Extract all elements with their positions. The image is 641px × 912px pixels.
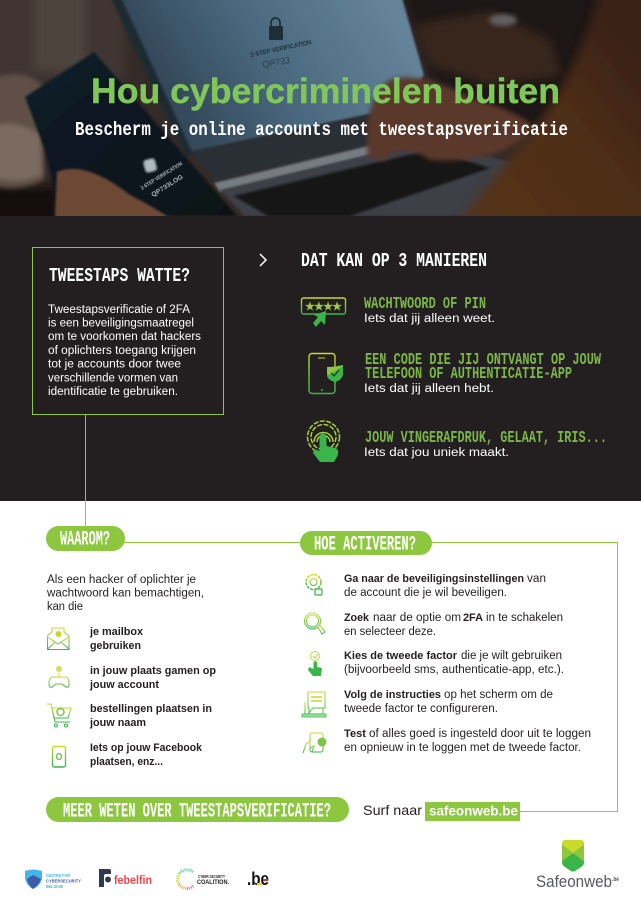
reason 1 (89, 626, 144, 652)
icon: fingerprint with hand (308, 421, 340, 462)
logo: cyber security coalition: COALITION. (197, 879, 229, 886)
step 5: of alles goed is ingesteld door uit te loggen (369, 728, 591, 740)
text block: definition: tot je accounts door twee (48, 358, 181, 370)
reason 3: jouw naam (89, 717, 146, 729)
icon: phone in hand with check (303, 733, 326, 753)
heading: tweestaps watte: TWEESTAPS WATTE? (49, 265, 190, 287)
logo: centre for cybersecurity belgium: CYBERSECURITY (46, 878, 82, 884)
method 1 text (364, 295, 495, 325)
reason 2: in jouw plaats gamen op (90, 665, 216, 677)
icon: shopping cart with bug (46, 704, 71, 727)
title: Hou cybercriminelen buiten (91, 72, 560, 111)
step 4: op het scherm om de (444, 689, 553, 701)
call to action pill (46, 797, 349, 824)
reason 4: Iets op jouw Facebook (90, 742, 203, 754)
icon: magnifying glass (304, 613, 325, 634)
icon: chevron (260, 254, 266, 266)
reason 3 (89, 703, 212, 729)
text block: waarom intro: Als een hacker of oplichter je (47, 574, 196, 586)
heading pill: hoe activeren: HOE ACTIVEREN? (314, 534, 416, 556)
method 2 text: Iets dat jij alleen hebt. (364, 383, 494, 395)
logo: .be: .be (247, 869, 269, 889)
text block: definition: is een beveiligingsmaatregel (48, 318, 194, 330)
logo: safeonweb (536, 840, 620, 891)
step 2: 2FA (463, 612, 483, 624)
reason 4 (90, 742, 203, 768)
method 1 text: WACHTWOORD OF PIN (364, 295, 486, 314)
step 2: in te schakelen (486, 612, 563, 624)
step 3 (344, 650, 564, 676)
icon: hand with check (308, 652, 322, 676)
surf naar text: Surf naar (363, 802, 422, 818)
connector line between panels and footer (124, 542, 618, 812)
text block: definition: verschillende vormen van (48, 372, 178, 384)
lock icons in photo (269, 18, 283, 40)
hero photo: laptop and phone with 2-step verification (0, 0, 641, 226)
heading: dat kan op 3 manieren: DAT KAN OP 3 MANIEREN (301, 250, 487, 272)
step 3: (bijvoorbeeld sms, authenticatie-app, etc.). (344, 664, 564, 676)
logo: cyber security coalition: CYBER SECURITY (198, 874, 226, 880)
step 4: Volg de instructies (344, 689, 441, 701)
website badge: safeonweb.be (429, 802, 518, 818)
text block: definition: om te voorkomen dat hackers (48, 331, 201, 343)
step 1: van (527, 573, 546, 585)
step 2: en selecteer deze. (344, 626, 436, 638)
logo: safeonweb: Safeonweb (536, 873, 612, 891)
logo: febelfin: febelfin (114, 875, 152, 887)
reason 1: je mailbox (89, 626, 144, 638)
hero photo: laptop and phone with 2-step verification: 2-STEP VERIFICATION (140, 161, 184, 192)
step 4 (344, 689, 553, 715)
heading pill: waarom: WAAROM? (60, 528, 110, 552)
step 4: tweede factor te configureren. (344, 703, 498, 715)
call to action pill: MEER WETEN OVER TWEESTAPSVERIFICATIE? (63, 800, 331, 824)
panel: tweestaps watte (32, 248, 224, 414)
reason 3: bestellingen plaatsen in (90, 703, 212, 715)
heading pill: waarom (46, 526, 125, 552)
icon: speech bubble on laptop (302, 692, 326, 717)
text block: definition: of oplichters toegang krijgen (48, 345, 196, 357)
step 2: Zoek (344, 612, 370, 624)
logo: safeonweb: .be (612, 877, 620, 883)
reason 4: plaatsen, enz... (90, 756, 163, 768)
logo: centre for cybersecurity belgium: BELGIUM (46, 884, 63, 890)
text block: definition (48, 304, 201, 398)
step 3: die je wilt gebruiken (461, 650, 562, 662)
hero photo: laptop and phone with 2-step verification: 2-STEP VERIFICATION (250, 39, 312, 59)
method 1 text: Iets dat jij alleen weet. (364, 313, 495, 325)
icon: phone with shield (309, 354, 343, 394)
hero photo: laptop and phone with 2-step verification: QP733LOG (150, 174, 185, 199)
text block: definition: identificatie te gebruiken. (48, 386, 178, 398)
step 3: Kies de tweede factor (344, 650, 458, 662)
logo: cyber security coalition (178, 870, 229, 888)
reason 2: jouw account (89, 679, 159, 691)
reason 2 (89, 665, 216, 691)
logo: centre for cybersecurity belgium: CENTRE FOR (46, 873, 70, 879)
icon: envelope with bug (48, 628, 69, 650)
connector line from box to waarom (84, 414, 86, 527)
icon: game controller with bug (49, 666, 69, 687)
icon: gear with lock (306, 574, 322, 595)
step 2: naar de optie om (373, 612, 461, 624)
logo: febelfin (99, 869, 152, 887)
method 2 text (364, 351, 602, 395)
icon: password field with cursor: ★★★★ (305, 301, 342, 313)
icon: password field with cursor (302, 298, 346, 327)
method 3 text (364, 429, 607, 459)
step 5: en opnieuw in te loggen met de tweede factor. (344, 742, 581, 754)
step 1: de account die je wil beveiligen. (344, 587, 507, 599)
text block: waarom intro: kan die (47, 601, 83, 613)
hero photo: laptop and phone with 2-step verification: QP733 (262, 55, 291, 71)
step 1 (344, 573, 546, 599)
step 1: Ga naar de beveiligingsinstellingen (344, 573, 524, 585)
reason 1: gebruiken (90, 640, 141, 652)
text block: waarom intro: wachtwoord kan bemachtigen, (46, 588, 204, 600)
method 3 text: Iets dat jou uniek maakt. (364, 447, 509, 459)
icon: phone with bug (52, 746, 66, 767)
step 2 (344, 612, 563, 638)
text block: waarom intro (46, 574, 204, 613)
logo: centre for cybersecurity belgium (25, 870, 82, 890)
step 5: Test (344, 728, 366, 740)
step 5 (344, 728, 591, 754)
dark panel background (0, 216, 641, 501)
heading pill: hoe activeren (300, 531, 432, 556)
text block: definition: Tweestapsverificatie of 2FA (48, 304, 190, 316)
